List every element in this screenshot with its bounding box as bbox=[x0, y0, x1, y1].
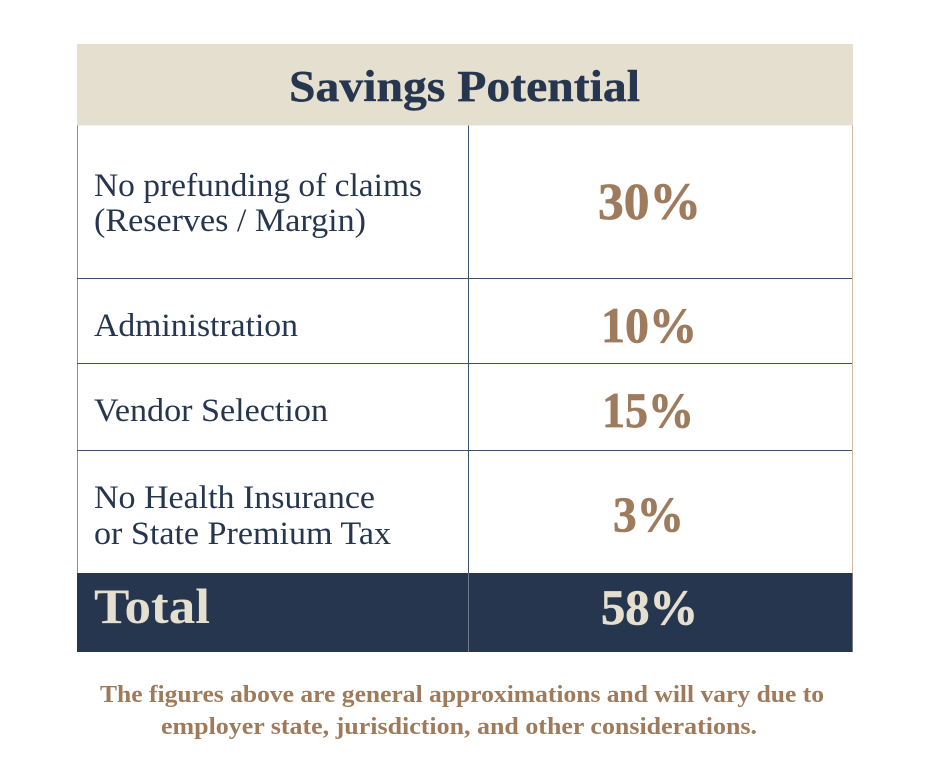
table outer border bbox=[77, 125, 853, 652]
row: administration: 10% bbox=[601, 297, 697, 353]
row: no health insurance bbox=[94, 480, 684, 552]
footnote bbox=[100, 682, 824, 740]
row: administration: Administration bbox=[94, 308, 298, 344]
row: no health insurance: or State Premium Tax bbox=[94, 516, 392, 552]
row: vendor selection: 15% bbox=[602, 382, 694, 438]
row: no prefunding: (Reserves / Margin) bbox=[94, 203, 366, 239]
row: no prefunding: No prefunding of claims bbox=[94, 168, 422, 204]
row: no health insurance: No Health Insurance bbox=[94, 480, 375, 516]
total row: 58% bbox=[601, 579, 698, 635]
table bbox=[77, 44, 853, 652]
header band bbox=[77, 44, 853, 126]
total row: Total bbox=[94, 578, 210, 634]
heading: Savings Potential bbox=[289, 62, 640, 111]
row dividers bbox=[77, 126, 852, 573]
row: no health insurance: 3% bbox=[613, 486, 684, 542]
row: administration bbox=[94, 297, 697, 353]
row: vendor selection: Vendor Selection bbox=[94, 393, 328, 429]
total row bbox=[77, 573, 852, 652]
row: no prefunding: 30% bbox=[598, 174, 701, 231]
footnote: employer state, jurisdiction, and other considerations. bbox=[161, 714, 757, 740]
row: vendor selection bbox=[94, 382, 694, 438]
footnote: The figures above are general approximations and will vary due to bbox=[100, 682, 824, 708]
row: no prefunding bbox=[94, 168, 701, 239]
